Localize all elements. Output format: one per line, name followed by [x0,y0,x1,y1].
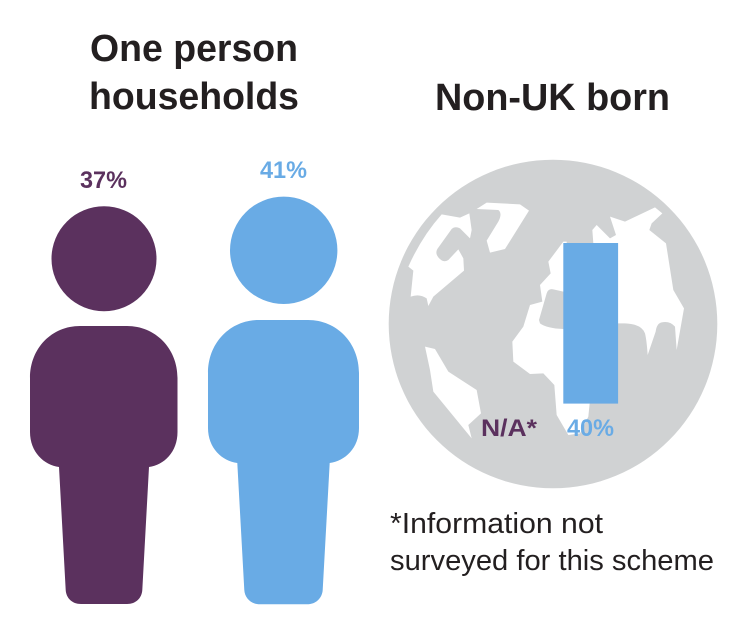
bar: 40% [563,243,618,404]
heading: non-UK born: Non-UK born [435,77,670,119]
icon: globe [389,160,717,488]
footnote [390,508,714,577]
icon: purple person [30,206,178,604]
footnote: *Information not [390,508,603,540]
heading: one person households [89,28,299,118]
label: 40%: 40% [567,415,614,442]
icon: blue person [208,197,359,604]
footnote: surveyed for this scheme [390,545,714,577]
label: N/A*: N/A* [481,415,538,442]
label: 37%: 37% [80,167,127,194]
heading: one person households: One person [90,28,298,70]
heading: one person households: households [89,76,299,118]
label: 41%: 41% [260,157,307,184]
